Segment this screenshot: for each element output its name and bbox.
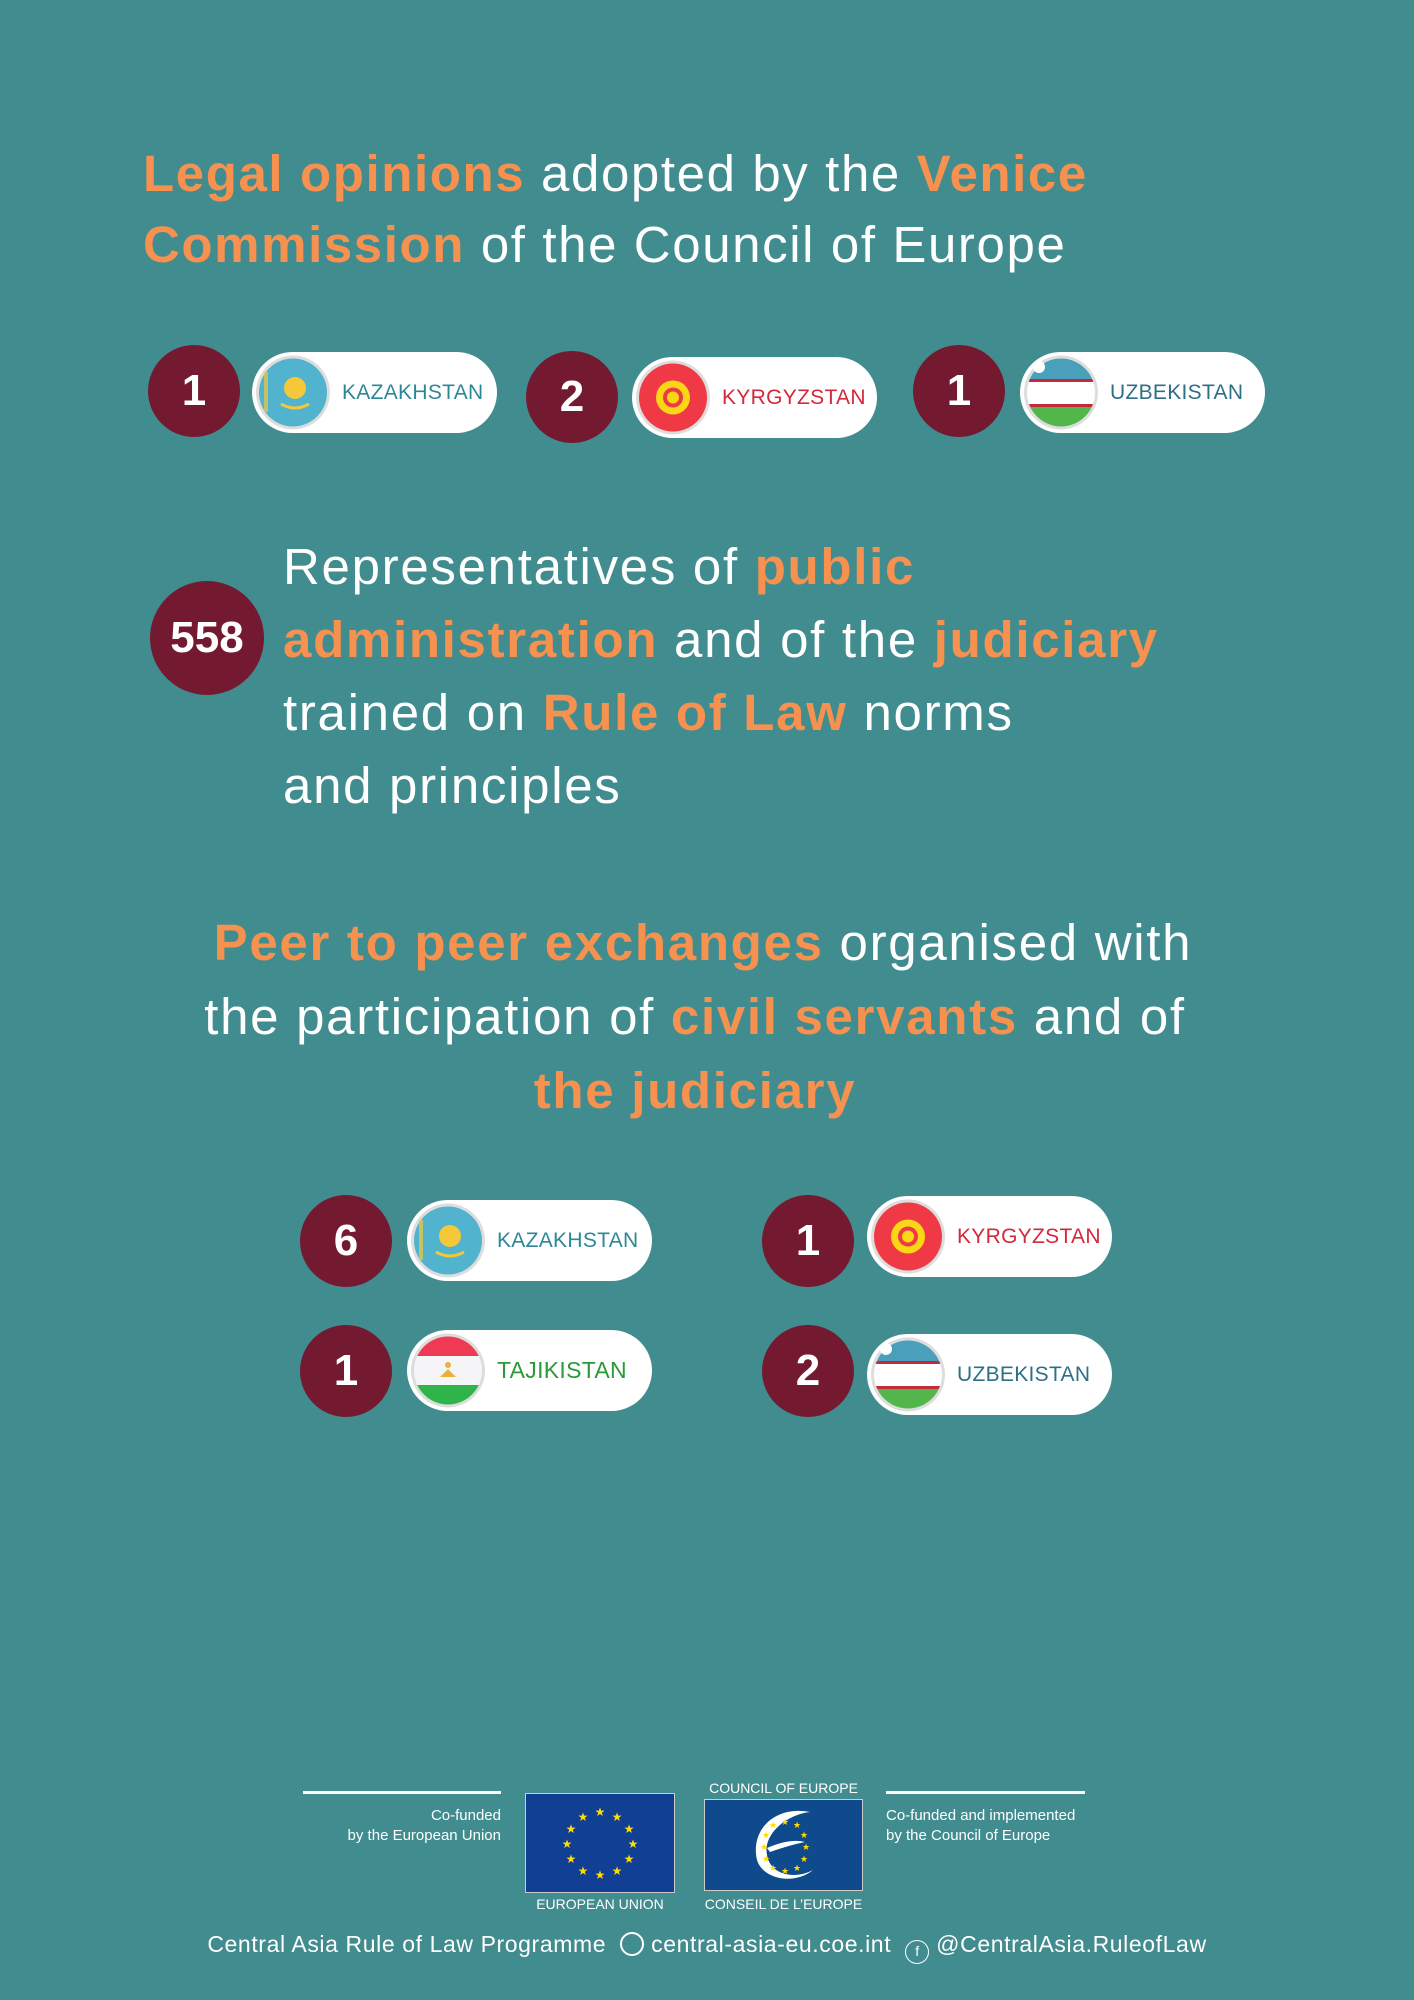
badge: 1 Uzbekistan <box>913 345 1265 437</box>
number circle 558 <box>150 581 264 695</box>
badge: 1 Uzbekistan: 1 <box>947 366 971 415</box>
logo: Council of Europe: ★ <box>781 1817 789 1827</box>
badge: 1 Tajikistan: TAJIKISTAN <box>497 1357 627 1383</box>
logo: Council of Europe <box>704 1799 863 1891</box>
logo: Council of Europe: ★ <box>781 1866 789 1876</box>
text block: trained on Rule of Law norms <box>283 684 1014 741</box>
badge: 1 Kazakhstan: 1 <box>182 366 206 415</box>
logo: Council of Europe: ★ <box>762 1854 770 1864</box>
logo: EU flag: ★ <box>612 1864 622 1878</box>
badge: 6 Kazakhstan: KAZAKHSTAN <box>497 1229 638 1252</box>
footer: programme links: f <box>915 1943 919 1959</box>
label: European Union: EUROPEAN UNION <box>536 1896 664 1912</box>
text: co-funded CoE: Co-funded and implemented <box>886 1807 1075 1824</box>
text block <box>283 538 1159 814</box>
text: co-funded CoE <box>886 1807 1075 1844</box>
number circle 558: 558 <box>170 613 244 662</box>
title: Commission of the Council of Europe <box>143 216 1066 273</box>
badge: 1 Kazakhstan: KAZAKHSTAN <box>342 381 483 404</box>
badge: 2 Kyrgyzstan: KYRGYZSTAN <box>722 386 866 409</box>
grid: peer exchanges per country <box>300 1195 1112 1417</box>
badge: 1 Kazakhstan <box>148 345 497 437</box>
heading: peer to peer: Peer to peer exchanges organised with <box>214 914 1192 971</box>
badge: 2 Uzbekistan <box>762 1325 1112 1417</box>
badge: 1 Kyrgyzstan: 1 <box>796 1216 820 1265</box>
badge: 1 Tajikistan: 1 <box>334 1346 358 1395</box>
badge: 6 Kazakhstan: 6 <box>334 1216 358 1265</box>
logo: Council of Europe: ★ <box>762 1830 770 1840</box>
footer logos <box>303 1780 1085 1912</box>
badge: 1 Kyrgyzstan: KYRGYZSTAN <box>957 1225 1101 1248</box>
logo: Council of Europe: ★ <box>793 1820 801 1830</box>
logo: Council of Europe: ★ <box>793 1863 801 1873</box>
heading: peer to peer: the participation of civil servants and of <box>204 988 1186 1045</box>
logo: EU flag <box>525 1793 675 1893</box>
title: Legal opinions adopted by the Venice <box>143 145 1088 202</box>
text: co-funded EU: by the European Union <box>348 1827 501 1844</box>
badge: 2 Uzbekistan: UZBEKISTAN <box>957 1363 1090 1386</box>
logo: EU flag: ★ <box>595 1868 605 1882</box>
logo: Council of Europe: ★ <box>800 1854 808 1864</box>
logo: Council of Europe: ★ <box>800 1830 808 1840</box>
logo: Council of Europe: ★ <box>769 1863 777 1873</box>
footer: programme links: Central Asia Rule of Law Programme central-asia-eu.coe.int @CentralAsia.RuleofLaw <box>207 1931 1207 1957</box>
text block: Representatives of public <box>283 538 915 595</box>
stat: 558 trained <box>150 538 1159 814</box>
label: Conseil de l'Europe: CONSEIL DE L’EUROPE <box>705 1896 862 1912</box>
logo: EU flag: ★ <box>566 1852 576 1866</box>
badge: 6 Kazakhstan <box>300 1195 652 1287</box>
logo: Council of Europe: ★ <box>802 1842 810 1852</box>
heading: peer to peer: the judiciary <box>534 1062 856 1119</box>
badge: 1 Kyrgyzstan <box>762 1195 1112 1287</box>
text: co-funded EU: Co-funded <box>431 1807 501 1824</box>
logo: EU flag: ★ <box>624 1852 634 1866</box>
badge: 1 Uzbekistan: UZBEKISTAN <box>1110 381 1243 404</box>
logo: Council of Europe: ★ <box>760 1842 768 1852</box>
logo: EU flag: ★ <box>566 1822 576 1836</box>
text: co-funded CoE: by the Council of Europe <box>886 1827 1050 1844</box>
text block: administration and of the judiciary <box>283 611 1159 668</box>
logo: EU flag: ★ <box>628 1837 638 1851</box>
text block: and principles <box>283 757 622 814</box>
text: co-funded EU <box>348 1807 501 1844</box>
logo: Council of Europe: ★ <box>769 1820 777 1830</box>
row 1: legal opinions per country <box>148 345 1265 443</box>
logo: EU flag: ★ <box>595 1805 605 1819</box>
logo: EU flag: ★ <box>624 1822 634 1836</box>
label: Council of Europe: COUNCIL OF EUROPE <box>709 1780 858 1796</box>
badge: 2 Uzbekistan: 2 <box>796 1346 820 1395</box>
title <box>143 145 1088 273</box>
logo: EU flag: ★ <box>578 1810 588 1824</box>
badge: 2 Kyrgyzstan: 2 <box>560 372 584 421</box>
badge: 1 Tajikistan <box>300 1325 652 1417</box>
badge: 2 Kyrgyzstan <box>526 351 877 443</box>
logo: EU flag: ★ <box>562 1837 572 1851</box>
logo: EU flag: ★ <box>578 1864 588 1878</box>
heading: peer to peer <box>204 914 1192 1119</box>
logo: EU flag: ★ <box>612 1810 622 1824</box>
